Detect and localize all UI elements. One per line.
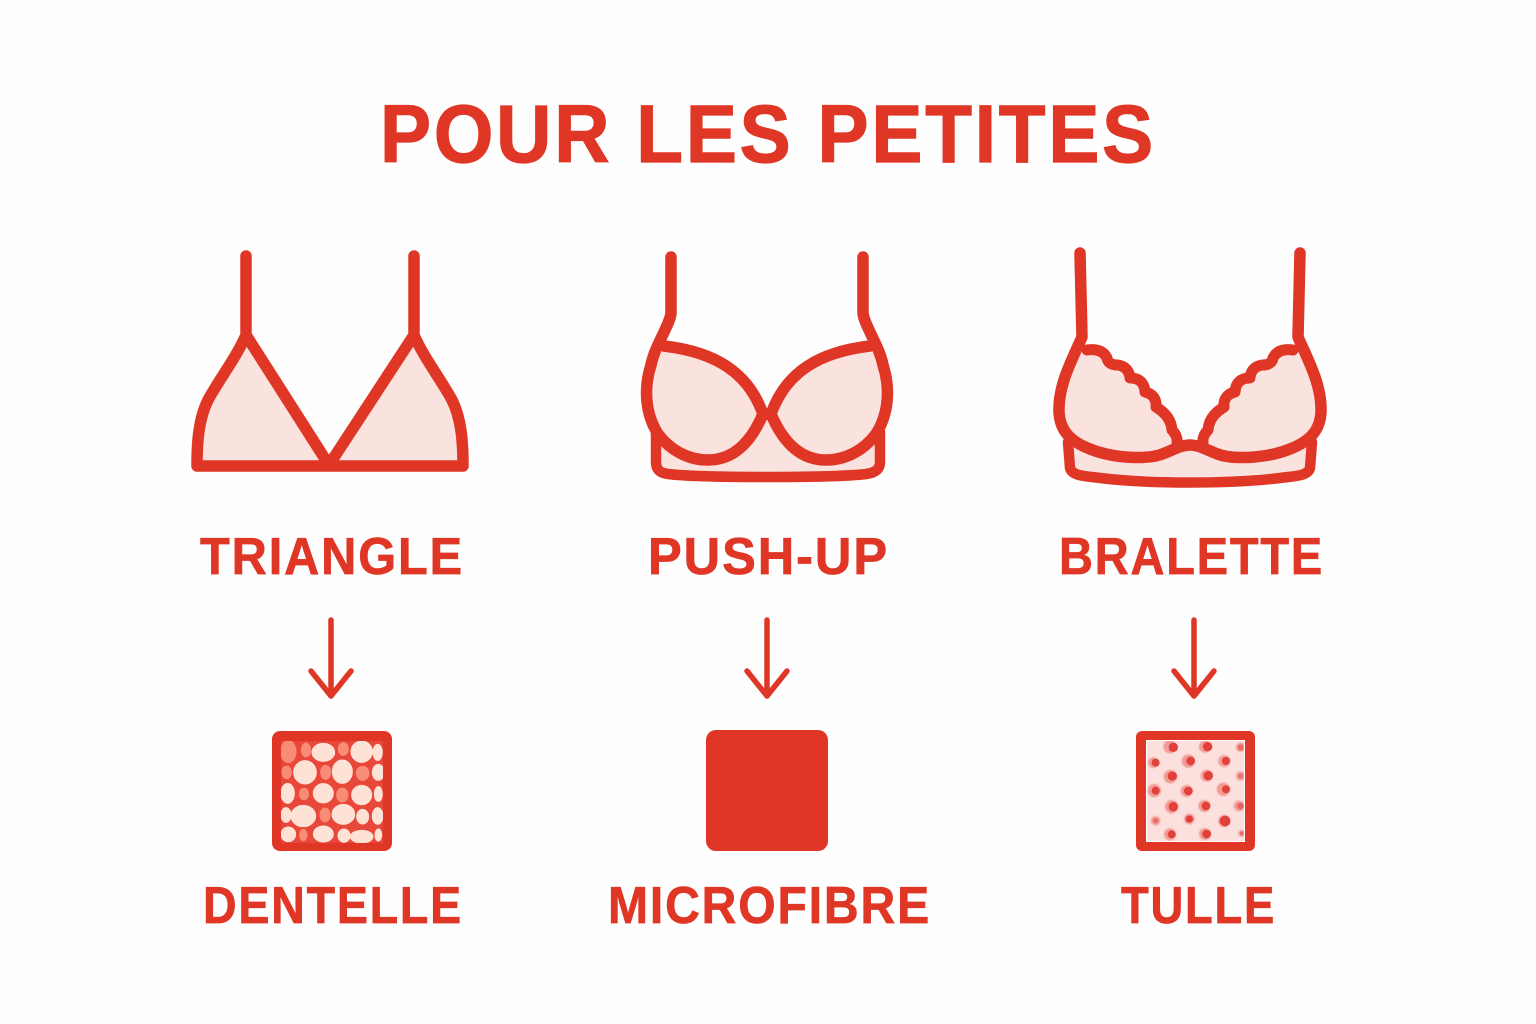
title: POUR LES PETITES — [380, 89, 1156, 180]
icon: bralette — [1059, 253, 1321, 482]
panel: triangle — [197, 256, 464, 935]
label: tulle: TULLE — [1121, 877, 1276, 935]
panel: bralette — [1059, 253, 1324, 935]
arrow: push-up to microfibre — [747, 620, 787, 696]
icon: triangle bra — [197, 256, 463, 466]
arrow: bralette to tulle — [1174, 620, 1214, 696]
swatch: microfibre — [706, 730, 828, 851]
label: dentelle: DENTELLE — [203, 877, 463, 935]
panel: push-up — [608, 257, 931, 935]
label: microfibre: MICROFIBRE — [608, 877, 931, 935]
icon: push-up bra — [647, 257, 887, 477]
label: triangle: TRIANGLE — [200, 528, 464, 586]
swatch: dentelle — [272, 731, 392, 851]
arrow: triangle to dentelle — [311, 620, 351, 696]
swatch: tulle — [1136, 731, 1255, 851]
label: bralette: BRALETTE — [1059, 528, 1324, 586]
label: push-up: PUSH-UP — [648, 528, 889, 586]
